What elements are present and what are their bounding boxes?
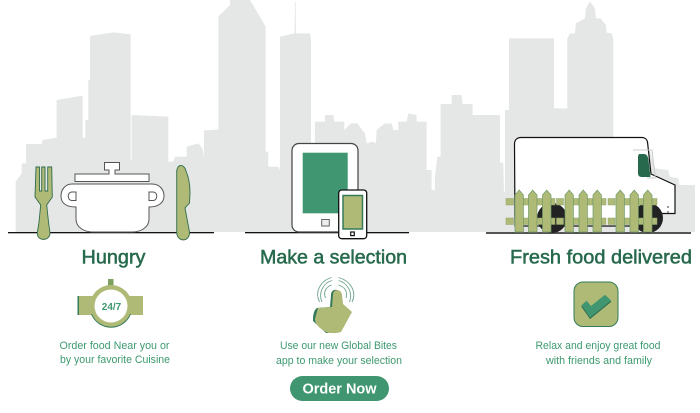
- truck body: [514, 138, 675, 226]
- hand: [315, 290, 352, 333]
- heading: Make a selection: Make a selection: [260, 246, 407, 268]
- mirror outline: [633, 150, 655, 178]
- button: Order Now: [290, 376, 389, 401]
- heading: Hungry: Hungry: [82, 246, 146, 268]
- ground line: middle: [245, 232, 409, 233]
- truck window: [638, 154, 650, 177]
- icon: 24/7 clock: 24/7: [102, 302, 122, 313]
- icon: tablet: [292, 144, 358, 232]
- icon: phone: [339, 190, 367, 239]
- button: Order Now: Order Now: [302, 382, 377, 398]
- icon: 24/7 clock: [78, 279, 143, 327]
- text: Hungry description: [60, 340, 170, 366]
- signal arcs: [318, 278, 354, 302]
- text: Make a selection description: Use our new Global Bites: [280, 340, 397, 352]
- text: Hungry description: by your favorite Cuisine: [60, 354, 170, 366]
- icon: fork: [35, 167, 52, 239]
- icon: delivery truck with picket fence: [506, 138, 675, 233]
- text: Fresh food delivered description: Relax and enjoy great food: [536, 340, 660, 352]
- truck details: [667, 206, 669, 213]
- text: Fresh food delivered description: with friends and family: [545, 355, 652, 367]
- ground line: left: [8, 232, 214, 233]
- text: Make a selection description: app to make your selection: [276, 355, 402, 367]
- icon: tapping hand: [313, 278, 354, 333]
- text: Fresh food delivered description: [536, 340, 660, 367]
- fence rails: [506, 198, 657, 224]
- truck wheels: [537, 203, 567, 233]
- ground line: right: [486, 232, 691, 234]
- fence pickets: [515, 190, 652, 232]
- icon: check mark badge: [574, 282, 618, 326]
- hand shadow: [313, 290, 342, 333]
- text: Hungry description: Order food Near you or: [60, 340, 170, 352]
- heading: Fresh food delivered: Fresh food delivered: [510, 246, 692, 268]
- text: Make a selection description: [276, 340, 402, 367]
- icon: knife: [177, 165, 190, 240]
- city skyline background: [16, 0, 695, 232]
- icon: cooking pot: [61, 162, 164, 232]
